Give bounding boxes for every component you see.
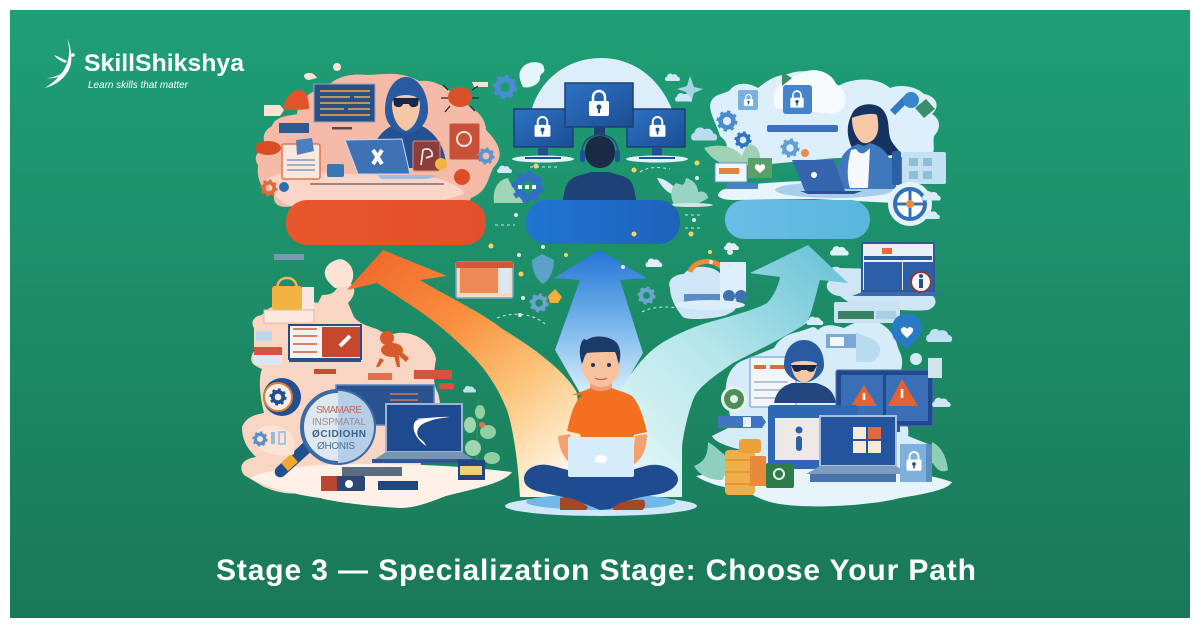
sparkles and small icons	[488, 127, 940, 325]
laptop	[345, 139, 434, 179]
laptop	[792, 160, 862, 194]
white laptop	[568, 437, 634, 477]
dashboard behind hacker	[750, 357, 796, 407]
banner card	[834, 302, 900, 323]
laptop with dragon logo	[372, 404, 478, 463]
red chips	[314, 369, 454, 389]
icon: dancer logo mark	[45, 38, 75, 88]
gear padlock badge	[263, 378, 301, 416]
back monitor	[336, 385, 434, 425]
icon: green play	[782, 72, 792, 86]
scene: dashboard and server icons between arrows	[456, 254, 747, 319]
title: Stage 3 — Specialization Stage: Choose Your Path	[216, 554, 976, 587]
centre monitor with info	[768, 405, 858, 469]
key and tag icons	[890, 92, 935, 118]
flame tag	[548, 289, 562, 303]
compass star	[677, 76, 703, 103]
globe badge	[888, 182, 932, 226]
green target badge	[766, 463, 794, 488]
plant	[464, 400, 500, 470]
hooded hacker	[370, 77, 446, 168]
table surface	[718, 181, 909, 203]
magnifying glass	[275, 391, 374, 477]
green heart box	[748, 158, 772, 178]
leaves right	[671, 178, 708, 205]
person: student with laptop	[505, 337, 697, 516]
right clouds	[910, 329, 952, 407]
icon: share gear	[515, 174, 541, 200]
slider tag	[718, 416, 766, 428]
role pill: blue	[526, 200, 680, 244]
leaf bunch	[694, 442, 730, 480]
green leaves right	[932, 442, 948, 471]
role pill: light blue	[725, 200, 870, 239]
peach cloud backdrop	[256, 74, 500, 207]
chip board	[458, 460, 485, 480]
dome backdrop	[531, 58, 673, 112]
coin stack	[725, 439, 766, 495]
small desktop card	[715, 163, 758, 189]
crossed legs	[524, 465, 678, 510]
gear and numbers cloud	[254, 426, 295, 456]
panel: digital forensics scene (bottom left)	[241, 254, 512, 508]
arms	[558, 434, 647, 466]
heart map pin	[892, 313, 922, 349]
small cloud icon	[665, 74, 680, 81]
gears	[718, 112, 809, 157]
dark drive	[378, 481, 418, 490]
pale blue cloud backdrop	[712, 321, 941, 480]
centre monitor	[565, 83, 633, 135]
magnifier text lines: SMAMARE	[316, 405, 362, 416]
white puzzle cloud	[520, 62, 544, 87]
gray dock	[342, 467, 402, 476]
orange t-shirt	[567, 388, 647, 447]
top tag	[274, 254, 304, 260]
sticker cards	[413, 123, 480, 171]
panel: cloud security scene (light blue, top right)	[704, 70, 946, 226]
head	[580, 337, 620, 396]
icon: blue gear	[495, 77, 515, 97]
icon: padlock yellow	[272, 278, 314, 310]
blue cup	[327, 164, 344, 177]
small clouds	[497, 127, 940, 325]
leaf base	[669, 203, 713, 207]
warning monitor	[836, 370, 933, 432]
blue status bar	[279, 123, 309, 133]
lock card small	[738, 90, 758, 110]
logo wordmark: SkillShikshya	[84, 50, 245, 77]
logo: SkillShikshya	[45, 38, 245, 91]
tiny cloud	[463, 386, 476, 392]
blue gear icon	[479, 149, 493, 163]
note card	[264, 310, 314, 323]
floor ellipse	[505, 494, 697, 516]
magnifier text lines: ØCIDIOHN	[312, 429, 366, 440]
laptop with tile logo	[806, 416, 910, 482]
icon: red hat	[283, 90, 309, 110]
shelf file chart	[902, 152, 946, 184]
red monitor	[289, 325, 361, 362]
panel: security monitoring scene (blue, top centre)	[494, 58, 713, 207]
dashboard card left of blue arrow	[456, 262, 513, 298]
progress bar	[767, 125, 838, 132]
code monitor	[314, 84, 375, 130]
red device	[321, 476, 365, 491]
leaves left	[494, 178, 524, 203]
hooded analyst	[774, 340, 836, 403]
magnifier text lines	[312, 405, 366, 452]
yellow stars	[488, 160, 712, 276]
report document	[282, 138, 320, 179]
green circle badge	[721, 386, 747, 412]
red toy creature	[255, 141, 281, 155]
magnifier text lines: INSPMATAL	[312, 417, 366, 428]
panel: endpoint security scene (bottom right)	[694, 243, 952, 506]
panel: offensive security scene (red, top left)	[255, 63, 500, 207]
lock card centre	[783, 85, 812, 114]
icon: shield	[532, 254, 554, 284]
right monitor	[626, 109, 688, 162]
peach and cream cloud backdrop	[241, 283, 440, 493]
left monitor	[512, 109, 574, 162]
base line	[310, 183, 444, 185]
cloud base server	[669, 262, 747, 319]
icon: bug	[441, 85, 479, 112]
map card	[826, 332, 880, 362]
white-blue cloud backdrop	[710, 71, 939, 165]
small cloud	[675, 93, 692, 102]
cyan sparkles	[514, 176, 733, 317]
icon: gear left of arrow	[531, 295, 547, 311]
top right laptop	[827, 243, 944, 311]
role pill: red	[286, 200, 486, 245]
icon: gear and pin	[262, 181, 289, 195]
arrow: teal path	[600, 245, 848, 497]
arrow: blue path	[554, 250, 647, 393]
small cloud right	[922, 191, 941, 200]
left side tags	[254, 331, 282, 365]
logo tagline: Learn skills that matter	[88, 79, 188, 91]
analyst with headset	[563, 135, 636, 200]
woman at laptop	[836, 104, 901, 189]
red pin badge	[454, 169, 470, 185]
white swoosh	[657, 178, 681, 196]
lock book	[900, 444, 932, 482]
dashed connectors	[495, 167, 701, 324]
magnifier text lines: ØHONIS	[317, 441, 355, 452]
arrow: orange path	[347, 250, 587, 497]
shoes	[560, 497, 645, 510]
leaf bunch	[704, 144, 760, 166]
orange ant creature	[376, 331, 409, 367]
small gear by server	[639, 288, 654, 303]
